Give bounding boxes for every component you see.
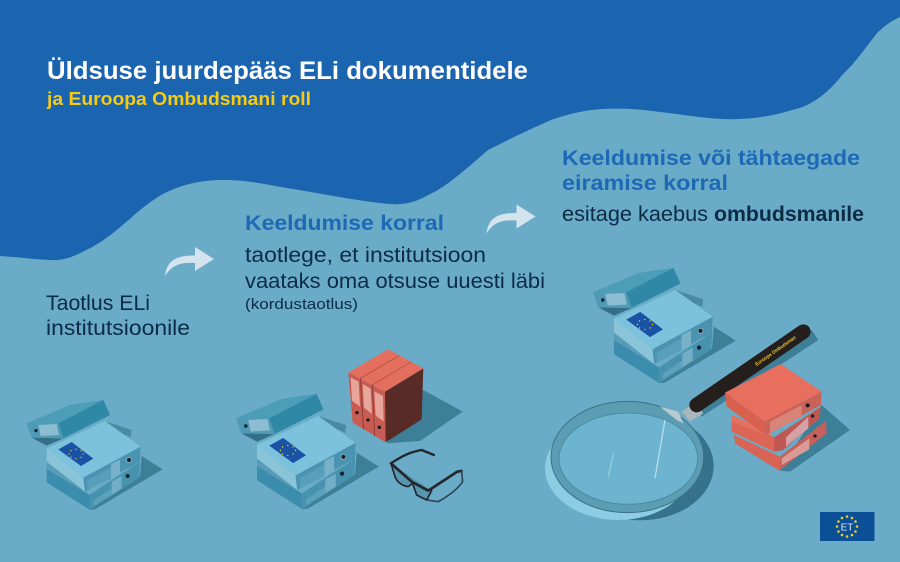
- illustration: binder stack 1: [27, 400, 163, 510]
- step 2 text: taotlege, et institutsioon: [245, 244, 486, 267]
- step 2 text: (kordustaotlus): [245, 296, 358, 313]
- step 3 text: [562, 203, 864, 226]
- step 2 heading: Keeldumise korral: [245, 212, 444, 235]
- EU flag with language code: ET: [841, 522, 853, 534]
- illustration: binder stack 2: [236, 394, 379, 509]
- step 3 text: ombudsmanile: [714, 203, 864, 226]
- step 2 text: [245, 244, 545, 313]
- arrow 1: [165, 247, 214, 276]
- step 1 text: Taotlus ELi: [46, 292, 150, 315]
- step 3 heading: Keeldumise või tähtaegade: [562, 147, 860, 170]
- step 1 text: institutsioonile: [46, 317, 190, 340]
- arrow 2: [486, 204, 536, 234]
- EU flag with language code: [820, 512, 874, 541]
- step 1 text: [46, 292, 190, 340]
- illustration: red binders: [348, 349, 463, 443]
- step 3 heading: [562, 147, 860, 195]
- handle label: Euroopa Ombudsman: [754, 335, 797, 368]
- illustration: binder stack 3: [593, 268, 736, 383]
- illustration: glasses: [391, 450, 463, 502]
- illustration: red binder stack: [725, 364, 850, 472]
- subtitle: ja Euroopa Ombudsmani roll: [46, 89, 311, 109]
- step 3 text: esitage kaebus: [562, 203, 708, 226]
- step 3 heading: eiramise korral: [562, 172, 728, 195]
- wave header band: [0, 0, 900, 260]
- step 2 text: vaataks oma otsuse uuesti läbi: [245, 270, 545, 293]
- title: Üldsuse juurdepääs ELi dokumentidele: [47, 56, 528, 85]
- illustration: magnifying glass: [545, 330, 818, 520]
